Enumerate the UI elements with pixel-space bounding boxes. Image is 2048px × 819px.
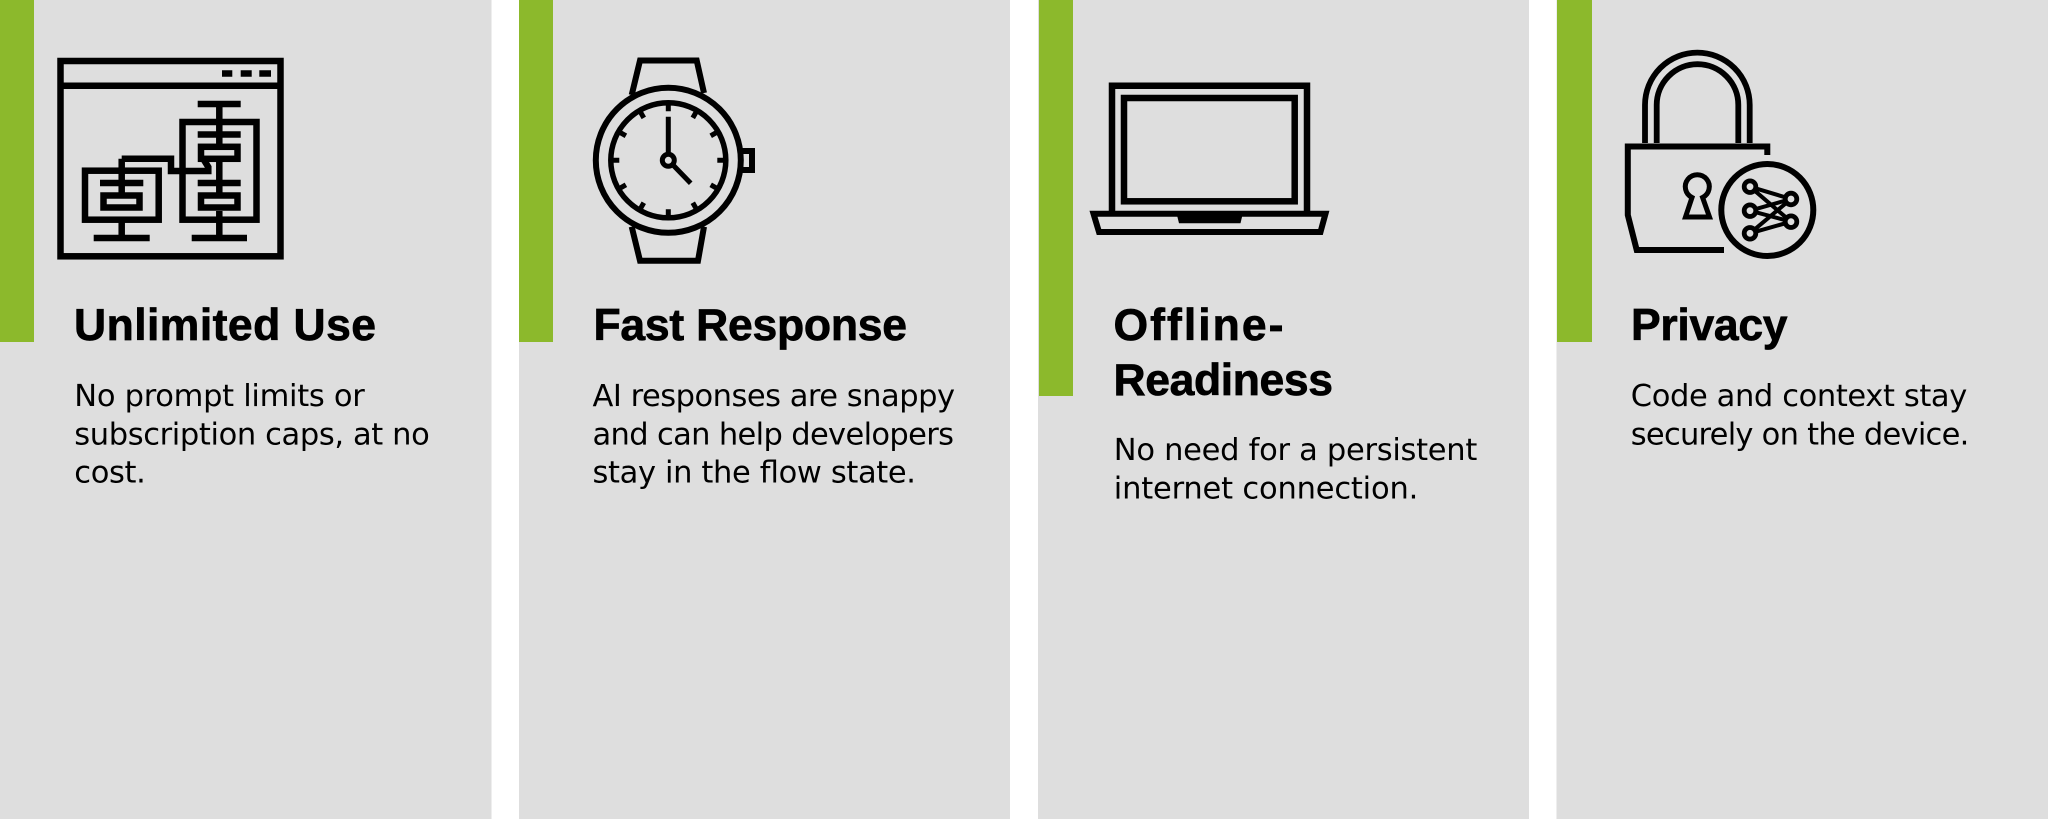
text: Unlimited Use description: No prompt limits or [74,379,365,414]
text: Privacy description [1631,379,1969,452]
heading: Offline-Readiness [1114,301,1333,405]
panel: Unlimited Use [0,0,492,819]
icon: wristwatch [596,60,752,261]
icon: laptop [1094,86,1326,232]
heading: Offline-Readiness: Offline- [1114,301,1284,350]
text: Fast Response description: and can help developers [592,418,954,452]
heading: Privacy: Privacy [1631,301,1788,350]
icon: padlock with neural network badge [1628,53,1813,256]
text: Privacy description: securely on the device. [1631,418,1969,452]
text: Fast Response description: stay in the flow state. [592,456,916,490]
text: Fast Response description [592,379,955,490]
icon: browser window with flowchart [60,61,280,256]
text: Offline-Readiness description [1114,433,1477,506]
heading: Fast Response: Fast Response [594,301,907,350]
panel: Offline-Readiness [1038,0,1529,819]
text: Unlimited Use description [74,379,430,490]
text: Unlimited Use description: cost. [74,456,146,490]
heading: Unlimited Use: Unlimited Use [74,301,376,350]
text: Offline-Readiness description: No need for a persistent [1114,433,1477,468]
panel: Fast Response [519,0,1010,819]
heading: Offline-Readiness: Readiness [1114,356,1333,405]
panel: Privacy [1556,0,2048,819]
text: Fast Response description: AI responses are snappy [592,379,955,414]
text: Privacy description: Code and context stay [1631,379,1967,414]
text: Offline-Readiness description: internet connection. [1114,472,1418,506]
text: Unlimited Use description: subscription caps, at no [74,418,430,452]
